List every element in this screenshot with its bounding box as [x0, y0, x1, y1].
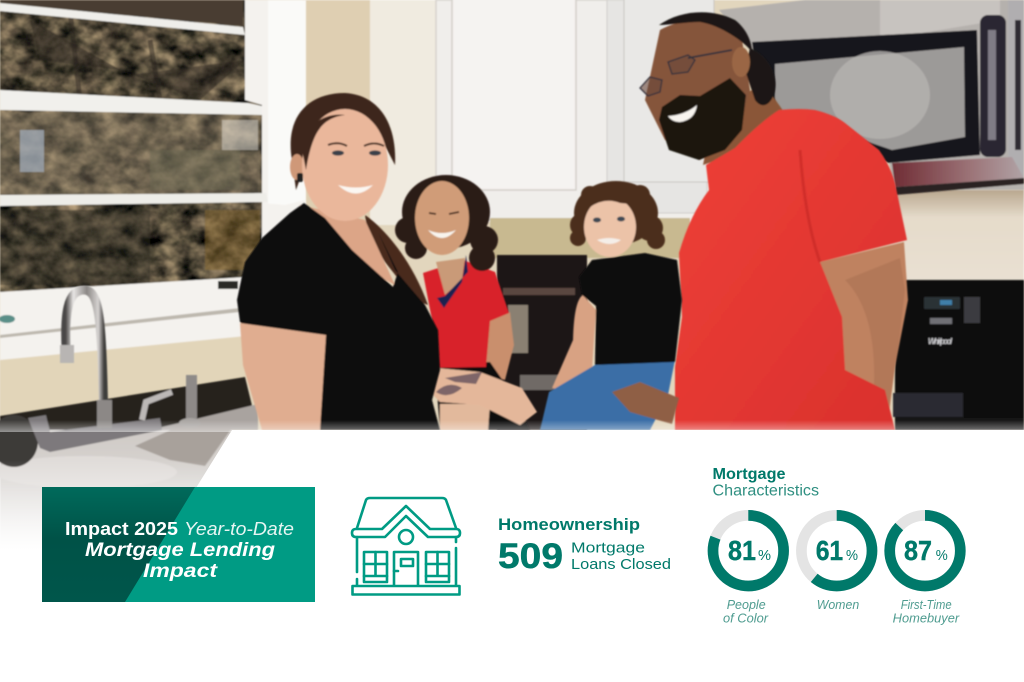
- homeownership stat: [498, 515, 671, 576]
- donut chart: people of color 81%: [713, 515, 784, 626]
- title banner: [42, 487, 315, 602]
- icon: house: [352, 498, 460, 594]
- donut chart: first-time homebuyer 87%: First-Time: [901, 598, 952, 612]
- donut chart: women 61%: [801, 515, 872, 612]
- loans closed caption line 2: Loans Closed: [571, 556, 671, 573]
- loans closed number: 509: [498, 537, 563, 576]
- donut chart: people of color 81%: %: [758, 547, 771, 564]
- donut chart: people of color 81%: People: [727, 598, 766, 612]
- banner heading line 1: Impact 2025: [65, 518, 178, 539]
- loans closed caption: Mortgage: [571, 540, 645, 556]
- countertop appliance: [497, 255, 587, 430]
- mortgage characteristics heading: [712, 466, 819, 499]
- sink and faucet: [0, 284, 258, 528]
- person: woman in black shirt: [237, 93, 440, 430]
- stove: [893, 280, 1024, 430]
- person: man in red shirt: [640, 12, 908, 430]
- donut chart: people of color 81%: of Color: [723, 612, 769, 626]
- stove: Whirlpool: [928, 337, 953, 346]
- window: [0, 0, 306, 418]
- homeownership heading: Homeownership: [498, 515, 640, 534]
- microwave: [719, 0, 1024, 195]
- mortgage characteristics heading: Mortgage: [712, 466, 786, 483]
- donut chart: first-time homebuyer 87%: %: [936, 547, 948, 564]
- donut chart: women 61%: %: [846, 547, 858, 564]
- donut chart: women 61%: Women: [817, 598, 859, 612]
- banner heading year-to-date: Year-to-Date: [184, 518, 294, 539]
- person: toddler in black shirt: [540, 181, 682, 430]
- person: girl in red polo: [395, 175, 537, 430]
- donut chart: first-time homebuyer 87%: Homebuyer: [893, 612, 960, 626]
- kitchen wall and cabinets: [0, 0, 1024, 430]
- mortgage characteristics heading: Characteristics: [712, 482, 819, 499]
- banner heading line 2: Mortgage Lending: [85, 540, 275, 561]
- banner heading line 3: Impact: [143, 561, 218, 582]
- donut chart: first-time homebuyer 87%: 87: [904, 535, 932, 566]
- donut chart: people of color 81%: 81: [728, 535, 756, 566]
- donut chart: first-time homebuyer 87%: [890, 515, 960, 626]
- bottom photo fade: [0, 420, 1024, 432]
- donut chart: women 61%: 61: [816, 535, 843, 566]
